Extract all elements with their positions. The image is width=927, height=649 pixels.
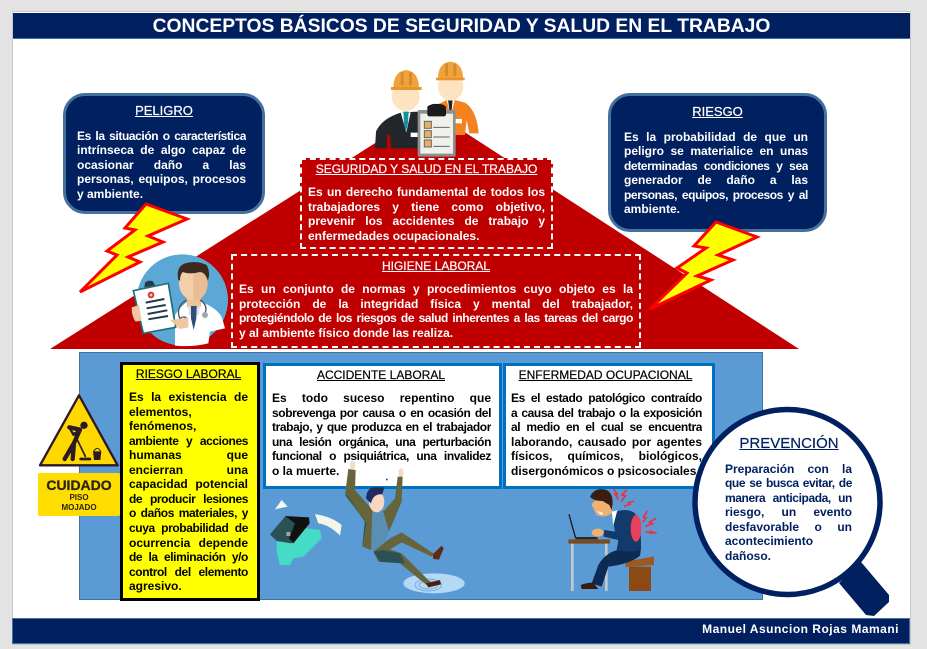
label: cuidado: CUIDADO	[46, 477, 112, 493]
text: accidente laboral: trabajo, y que produzca en el trabajador	[272, 420, 491, 434]
text: seguridad: enfermedades ocupacionales.	[308, 229, 479, 243]
panel: cuidado piso mojado	[38, 473, 120, 516]
text: riesgo laboral: de producir lesiones	[129, 492, 248, 506]
footer bar: Manuel Asuncion Rojas Mamani	[702, 622, 899, 636]
text: higiene	[239, 282, 633, 340]
text: enfermedad ocupacional: físicos, químicos, biológicos,	[511, 449, 702, 463]
text: riesgo laboral: capacidad potencial	[129, 477, 248, 491]
text: seguridad: Es un derecho fundamental de todos los	[308, 185, 545, 199]
text: riesgo laboral	[129, 390, 248, 593]
text: higiene: protegiéndolo de los riesgos de salud inherentes a las tareas del cargo	[239, 311, 633, 325]
title bar: CONCEPTOS BÁSICOS DE SEGURIDAD Y SALUD EN EL TRABAJO	[153, 16, 770, 37]
text: seguridad: trabajadores y tiene como objetivo,	[308, 200, 545, 214]
text: riesgo laboral: cuya probabilidad de	[129, 521, 248, 535]
panel: riesgo laboral	[120, 362, 260, 601]
text: riesgo laboral: ambiente y acciones	[129, 434, 248, 448]
text: prevencion	[725, 462, 852, 563]
text: riesgo laboral: control del elemento	[129, 565, 248, 579]
text: peligro: intrínseca de algo capaz de	[77, 143, 246, 157]
footer bar	[12, 618, 910, 644]
heading: higiene: HIGIENE LABORAL	[382, 259, 490, 273]
text: riesgo laboral: de la eliminación y/o	[129, 550, 248, 564]
text: seguridad: prevenir los accidentes de trabajo y	[308, 214, 545, 228]
text: peligro: ocasionar daño a las	[77, 158, 246, 172]
label: piso mojado	[61, 493, 97, 512]
text: prevencion: dañoso.	[725, 549, 771, 563]
text: riesgo laboral: encierran una	[129, 463, 248, 477]
text: seguridad	[308, 185, 545, 243]
text: prevencion: riesgo, un evento	[725, 505, 852, 519]
text: enfermedad ocupacional: Es el estado patológico contraído	[511, 391, 702, 405]
text: riesgo: ambiente.	[624, 202, 680, 216]
text: riesgo: peligro se materialice en unas	[624, 144, 808, 158]
text: enfermedad ocupacional: a causa del trabajo o la exposición	[511, 406, 702, 420]
panel: prevencion	[725, 434, 852, 563]
heading: riesgo: RIESGO	[692, 104, 743, 119]
text: prevencion: Preparación con la	[725, 462, 852, 476]
text: accidente laboral: Es todo suceso repentino que	[272, 391, 491, 405]
heading: riesgo laboral: RIESGO LABORAL	[136, 367, 241, 381]
text: riesgo laboral: ocurrencia depende	[129, 536, 248, 550]
text: riesgo laboral: elementos,	[129, 405, 192, 419]
text: accidente laboral: sobrevenga por causa o en ocasión del	[272, 406, 491, 420]
text: peligro: personas, equipos, procesos	[77, 172, 246, 186]
heading: peligro: PELIGRO	[135, 103, 193, 118]
text: riesgo	[624, 130, 808, 216]
text: accidente laboral: o la muerte.	[272, 464, 339, 478]
text: enfermedad ocupacional: laborando, causado por agentes	[511, 435, 702, 449]
heading: seguridad: SEGURIDAD Y SALUD EN EL TRABAJO	[316, 162, 537, 176]
text: riesgo: generador de daño a las	[624, 173, 808, 187]
heading: accidente laboral: ACCIDENTE LABORAL	[317, 368, 445, 382]
text: prevencion: acontecimiento	[725, 534, 813, 548]
panel: building base	[79, 352, 763, 600]
text: prevencion: que se busca evitar, de	[725, 476, 852, 490]
label: piso mojado: MOJADO	[61, 503, 97, 512]
panel: enfermedad ocupacional	[503, 363, 715, 489]
panel: higiene laboral	[231, 254, 641, 348]
text: peligro: y ambiente.	[77, 187, 143, 201]
text: peligro	[77, 128, 246, 201]
text: riesgo laboral: fenómenos,	[129, 419, 196, 433]
text: riesgo: determinadas condiciones y sea	[624, 159, 808, 173]
heading: enfermedad ocupacional: ENFERMEDAD OCUPACIONAL	[519, 368, 692, 382]
text: enfermedad ocupacional	[511, 391, 702, 478]
panel: riesgo	[608, 93, 827, 232]
text: riesgo: personas, equipos, procesos y al	[624, 188, 808, 202]
text: accidente laboral	[272, 391, 491, 478]
text: riesgo laboral: Es la existencia de	[129, 390, 248, 404]
label: piso mojado: PISO	[69, 493, 89, 502]
text: prevencion: desfavorable o un	[725, 520, 852, 534]
text: accidente laboral: una lesión orgánica, una perturbación	[272, 435, 491, 449]
text: higiene: Es un conjunto de normas y procedimientos cuyo objeto es la	[239, 282, 633, 296]
heading: prevencion: PREVENCIÓN	[739, 435, 839, 452]
text: higiene: protección de la integridad física y mental del trabajador,	[239, 297, 633, 311]
text: enfermedad ocupacional: al medio en el cual se encuentra	[511, 420, 702, 434]
panel: peligro	[63, 93, 265, 214]
text: peligro: Es la situación o característica	[77, 128, 246, 142]
panel: accidente laboral	[263, 363, 502, 489]
text: riesgo: Es la probabilidad de que un	[624, 130, 808, 144]
panel: seguridad y salud en el trabajo	[300, 158, 553, 249]
text: riesgo laboral: o daños materiales, y	[129, 506, 248, 520]
title bar	[13, 13, 910, 39]
text: enfermedad ocupacional: disergonómicos o psicosociales.	[511, 464, 700, 478]
text: riesgo laboral: agresivo.	[129, 579, 182, 593]
text: higiene: y al ambiente físico donde las realiza.	[239, 326, 453, 340]
text: riesgo laboral: humanas que	[129, 448, 248, 462]
text: prevencion: manera anticipada, un	[725, 491, 852, 505]
text: accidente laboral: funcional o psiquiátrica, una invalidez	[272, 449, 491, 463]
